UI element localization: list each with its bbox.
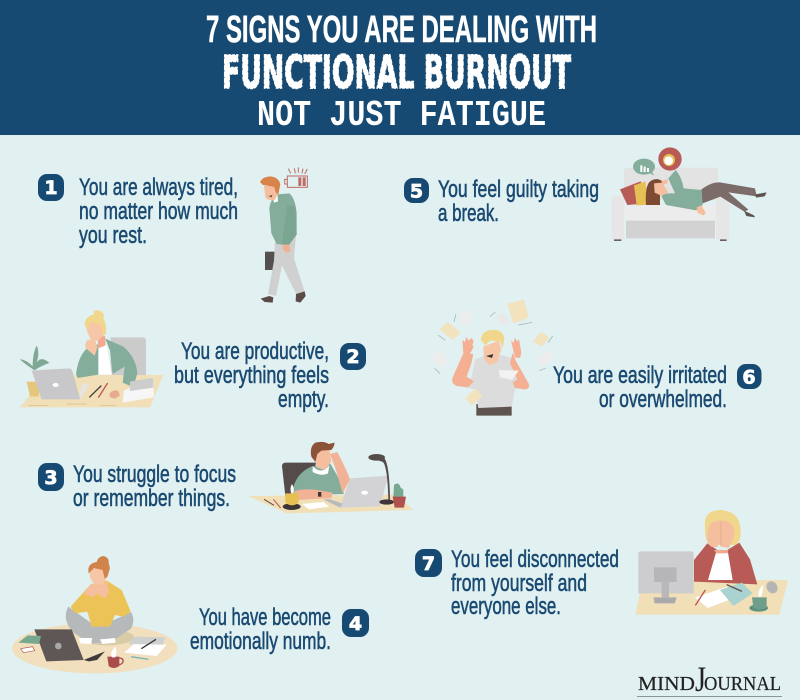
text: sign 6 — [553, 362, 727, 413]
illustration: woman cross-legged with laptop — [12, 556, 177, 673]
text: sign 4: emotionally numb. — [190, 628, 331, 655]
logo: Mind Journal: J — [695, 659, 706, 699]
badge 3 — [38, 463, 64, 491]
panel: sign 3 — [38, 442, 413, 513]
illustration: man at desk with lamp — [248, 442, 413, 513]
logo: Mind Journal: MIND — [638, 673, 695, 695]
title line 2: FUNCTIONAL BURNOUT — [222, 46, 571, 99]
text: sign 5: You feel guilty taking — [438, 176, 599, 203]
badge 7: 7 — [422, 553, 435, 575]
badge 3: 3 — [44, 467, 58, 489]
logo: Mind Journal — [637, 659, 782, 699]
badge 1: 1 — [44, 177, 58, 199]
title line 3: NOT JUST FATIGUE — [257, 95, 546, 136]
panel: sign 5 — [404, 147, 767, 241]
illustration: woman covering face at desk — [635, 510, 788, 615]
badge 2 — [340, 343, 366, 370]
text: sign 1: You are always tired, — [79, 174, 238, 201]
panel: sign 7 — [415, 510, 788, 620]
text: sign 3 — [73, 461, 236, 512]
badge 5 — [404, 178, 429, 203]
text: sign 2: but everything feels — [174, 362, 329, 389]
panel: sign 4 — [12, 556, 369, 673]
text: sign 3: You struggle to focus — [73, 461, 236, 488]
text: sign 6: You are easily irritated — [553, 362, 727, 389]
text: sign 7: You feel disconnected — [451, 546, 619, 573]
badge 6: 6 — [742, 366, 756, 388]
header banner — [0, 0, 800, 136]
text: sign 5: a break. — [438, 200, 499, 227]
text: sign 3: or remember things. — [73, 485, 230, 512]
text: sign 2: empty. — [278, 386, 329, 413]
text: sign 1 — [79, 174, 238, 249]
badge 6 — [737, 364, 762, 389]
badge 1 — [38, 174, 64, 201]
text: sign 7 — [451, 546, 619, 620]
text: sign 6: or overwhelmed. — [599, 386, 727, 413]
panel: sign 2 — [20, 310, 366, 413]
illustration: woman at laptop — [20, 310, 163, 407]
badge 4 — [342, 609, 369, 637]
text: sign 4: You have become — [199, 604, 331, 631]
text: sign 5 — [438, 176, 599, 227]
illustration: overwhelmed man with flying papers — [431, 299, 554, 416]
badge 2: 2 — [346, 346, 360, 368]
panel: sign 6 — [431, 299, 762, 416]
logo: Mind Journal: OURNAL — [704, 673, 781, 695]
text: sign 7: everyone else. — [451, 593, 561, 620]
badge 7 — [415, 549, 442, 577]
text: sign 1: you rest. — [79, 222, 147, 249]
badge 5: 5 — [410, 180, 423, 202]
text: sign 4 — [190, 604, 331, 655]
text: sign 7: from yourself and — [451, 570, 587, 597]
badge 4: 4 — [349, 613, 362, 635]
text: sign 1: no matter how much — [79, 198, 238, 225]
panel: sign 1 — [38, 167, 307, 303]
text: sign 2 — [174, 338, 329, 413]
text: sign 2: You are productive, — [181, 338, 329, 365]
illustration: woman on sofa — [612, 147, 767, 241]
illustration: tired man with low battery — [260, 167, 307, 303]
